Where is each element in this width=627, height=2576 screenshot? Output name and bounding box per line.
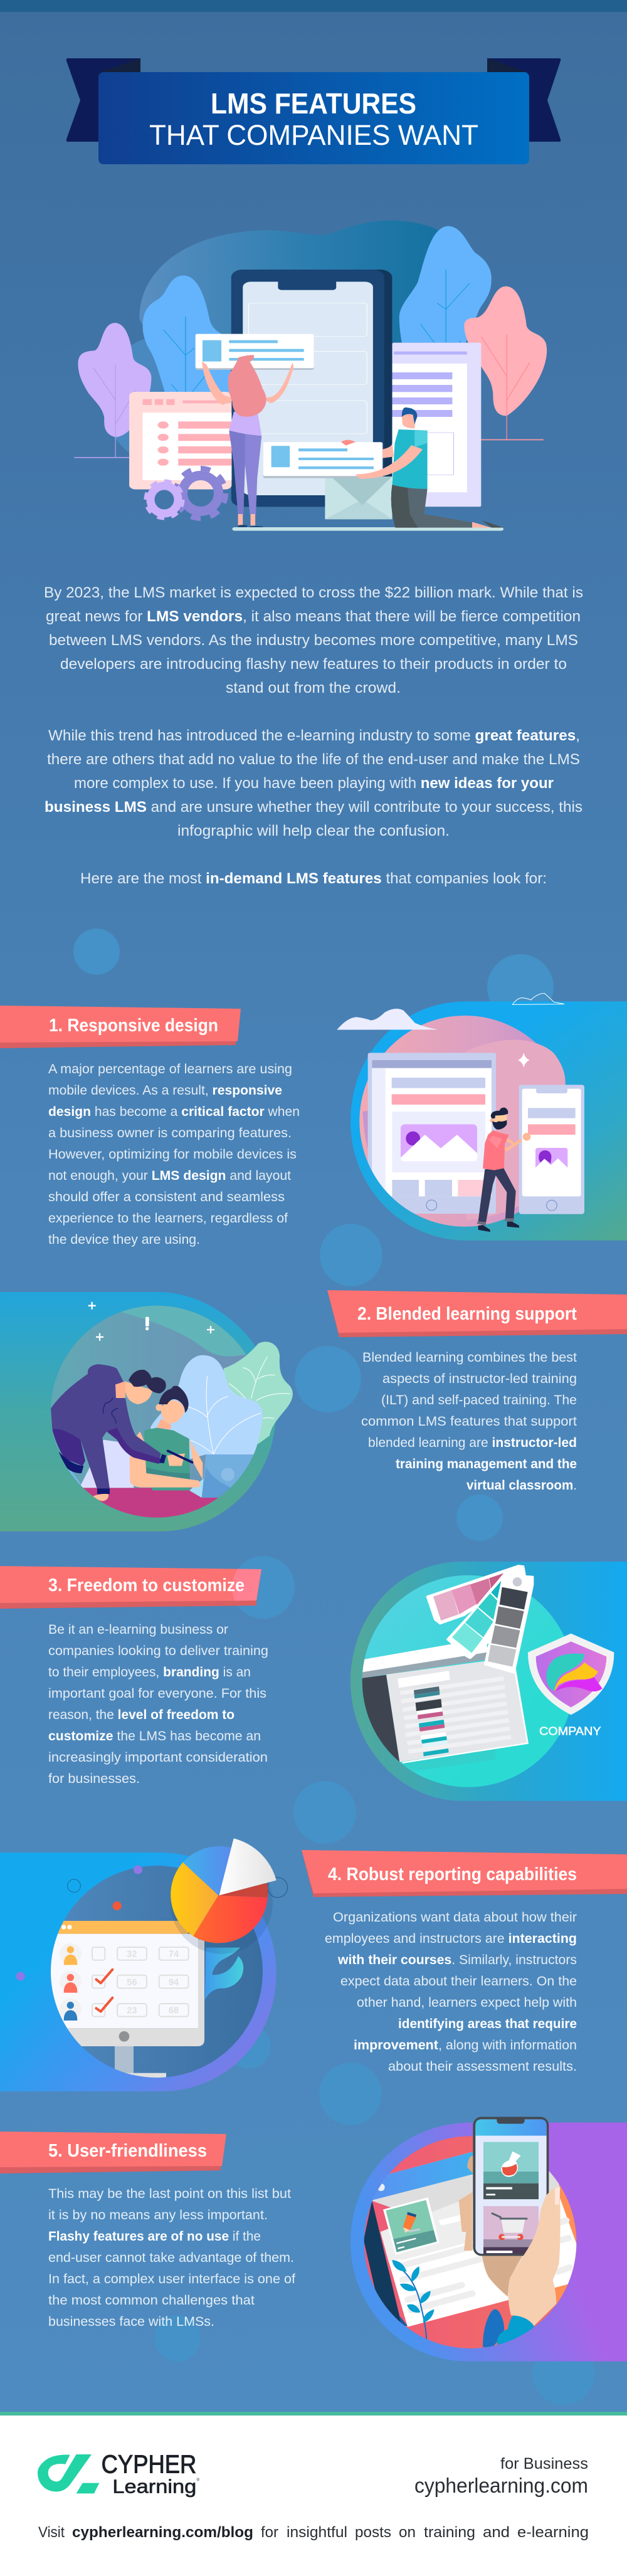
section 3 illustration: branding customization: COMPANY [539, 1725, 601, 1738]
section 5 illustration: mobile app in hand [350, 2117, 627, 2362]
section 2 text [361, 1350, 577, 1493]
intro text: stand out from the crowd. [226, 680, 401, 697]
section 5 text: Flashy features are of no use if the [48, 2229, 261, 2244]
section 5 text: end-user cannot take advantage of them. [48, 2251, 294, 2265]
decorative circles [73, 928, 595, 2405]
section 2 heading [327, 1290, 627, 1337]
section 2 text: training management and the [396, 1457, 577, 1471]
section 1 text: experience to the learners, regardless of [48, 1211, 288, 1226]
footer contact [414, 2455, 588, 2497]
company logo: Learning [112, 2476, 196, 2498]
section 4 text: expect data about their learners. On the [340, 1974, 577, 1989]
section 3 text: to their employees, branding is an [48, 1665, 251, 1680]
intro text: developers are introducing flashy new features to their products in order to [60, 656, 567, 673]
section 4 illustration: reporting dashboard: 74 [169, 1950, 179, 1960]
section 1 text: the device they are using. [48, 1233, 200, 1247]
icon: gears [145, 468, 226, 518]
section 3 heading [0, 1566, 261, 1609]
section 3 heading: 3. Freedom to customize [48, 1575, 245, 1596]
section 3 text: customize the LMS has become an [48, 1729, 261, 1743]
intro text: there are others that add no value to the life of the end-user and make the LMS [47, 751, 580, 768]
footer call to action: e-learning [517, 2524, 589, 2541]
intro text: By 2023, the LMS market is expected to cross the $22 billion mark. While that is [44, 584, 583, 601]
section 5 text: In fact, a complex user interface is one of [48, 2272, 295, 2286]
section 1 illustration: responsive devices [337, 993, 627, 1241]
footer call to action: for [261, 2524, 278, 2541]
section 4 illustration: reporting dashboard: 23 [127, 2006, 137, 2016]
section 1 heading: 1. Responsive design [49, 1016, 218, 1036]
section 3 text [48, 1622, 268, 1786]
section 1 text: design has become a critical factor when [48, 1105, 300, 1119]
section 4 illustration: reporting dashboard: 56 [127, 1977, 137, 1987]
section 5 text: businesses face with LMSs. [48, 2315, 214, 2329]
intro text: between LMS vendors. As the industry becomes more competitive, many LMS [49, 632, 578, 649]
footer call to action: Visit [38, 2524, 65, 2541]
section 4 text: Organizations want data about how their [333, 1910, 577, 1925]
top band [0, 0, 627, 12]
section 1 text: However, optimizing for mobile devices is [48, 1147, 297, 1162]
section 2 heading: 2. Blended learning support [357, 1304, 577, 1324]
section 4 text: employees and instructors are interacting [325, 1932, 577, 1946]
footer call to action: cypherlearning.com/blog [72, 2524, 253, 2541]
footer call to action: on [399, 2524, 416, 2541]
intro text: great news for LMS vendors, it also means that there will be fierce competition [46, 608, 581, 625]
section 3 text: important goal for everyone. For this [48, 1686, 266, 1701]
section 3 text: for businesses. [48, 1772, 140, 1786]
footer call to action: insightful [287, 2524, 347, 2541]
title ribbon: THAT COMPANIES WANT [149, 119, 478, 151]
section 4 text [325, 1910, 577, 2074]
section 4 text: improvement, along with information [354, 2038, 577, 2053]
section 5 text: This may be the last point on this list but [48, 2187, 291, 2201]
footer call to action: training [424, 2524, 475, 2541]
section 4 illustration: reporting dashboard [0, 1838, 288, 2091]
footer panel [0, 2414, 627, 2576]
footer call to action: posts [355, 2524, 391, 2541]
footer call to action [38, 2524, 589, 2541]
section 2 text: Blended learning combines the best [362, 1350, 577, 1365]
company logo: CYPHER [102, 2449, 196, 2478]
section 4 heading: 4. Robust reporting capabilities [328, 1864, 577, 1885]
section 1 text: mobile devices. As a result, responsive [48, 1083, 282, 1098]
intro text: Here are the most in-demand LMS features that companies look for: [80, 870, 547, 887]
section 3 text: companies looking to deliver training [48, 1644, 268, 1658]
section 1 text: a business owner is comparing features. [48, 1126, 292, 1140]
section 5 heading [0, 2132, 226, 2174]
company logo: ® [196, 2478, 199, 2483]
intro text: While this trend has introduced the e-learning industry to some great features, [48, 727, 580, 744]
section 4 illustration: reporting dashboard: 68 [169, 2006, 179, 2016]
section 1 heading [0, 1006, 241, 1048]
section 5 heading: 5. User-friendliness [48, 2141, 207, 2161]
section 4 text: with their courses. Similarly, instructors [337, 1953, 577, 1967]
section 2 text: common LMS features that support [361, 1414, 577, 1429]
section 2 text: (ILT) and self-paced training. The [381, 1393, 577, 1407]
section 4 text: other hand, learners expect help with [357, 1995, 577, 2010]
hero illustration [74, 221, 547, 531]
section 4 illustration: reporting dashboard: 94 [169, 1977, 179, 1987]
section 3 text: reason, the level of freedom to [48, 1708, 234, 1722]
section 4 text: about their assessment results. [388, 2059, 577, 2074]
section 4 illustration: reporting dashboard: 32 [127, 1950, 137, 1960]
section 3 illustration: branding customization [350, 1562, 627, 1801]
section 3 text: Be it an e-learning business or [48, 1622, 228, 1637]
title ribbon [66, 58, 561, 164]
section 1 text: not enough, your LMS design and layout [48, 1169, 291, 1183]
section 2 illustration: instructor and learner [0, 1292, 314, 1532]
title ribbon: LMS FEATURES [211, 87, 416, 120]
intro text: more complex to use. If you have been playing with new ideas for your [74, 775, 554, 792]
section 2 text: virtual classroom. [466, 1478, 577, 1493]
footer call to action: and [483, 2524, 510, 2541]
section 3 text: increasingly important consideration [48, 1750, 268, 1765]
section 5 text [48, 2187, 295, 2329]
section 2 text: aspects of instructor-led training [382, 1372, 577, 1386]
company logo [38, 2449, 199, 2498]
footer contact: for Business [500, 2455, 588, 2473]
footer divider [0, 2412, 627, 2416]
section 1 text: A major percentage of learners are using [48, 1062, 292, 1076]
section 1 text: should offer a consistent and seamless [48, 1190, 285, 1204]
intro text [44, 584, 583, 887]
footer contact: cypherlearning.com [414, 2474, 588, 2497]
intro text: business LMS and are unsure whether they will contribute to your success, this [45, 799, 582, 816]
section 4 heading [302, 1850, 627, 1897]
intro text: infographic will help clear the confusion. [177, 823, 450, 839]
section 1 text [48, 1062, 300, 1247]
section 5 text: it is by no means any less important. [48, 2208, 268, 2222]
section 2 text: blended learning are instructor-led [368, 1436, 577, 1450]
section 4 text: identifying areas that require [398, 2017, 577, 2031]
section 5 text: the most common challenges that [48, 2293, 255, 2308]
